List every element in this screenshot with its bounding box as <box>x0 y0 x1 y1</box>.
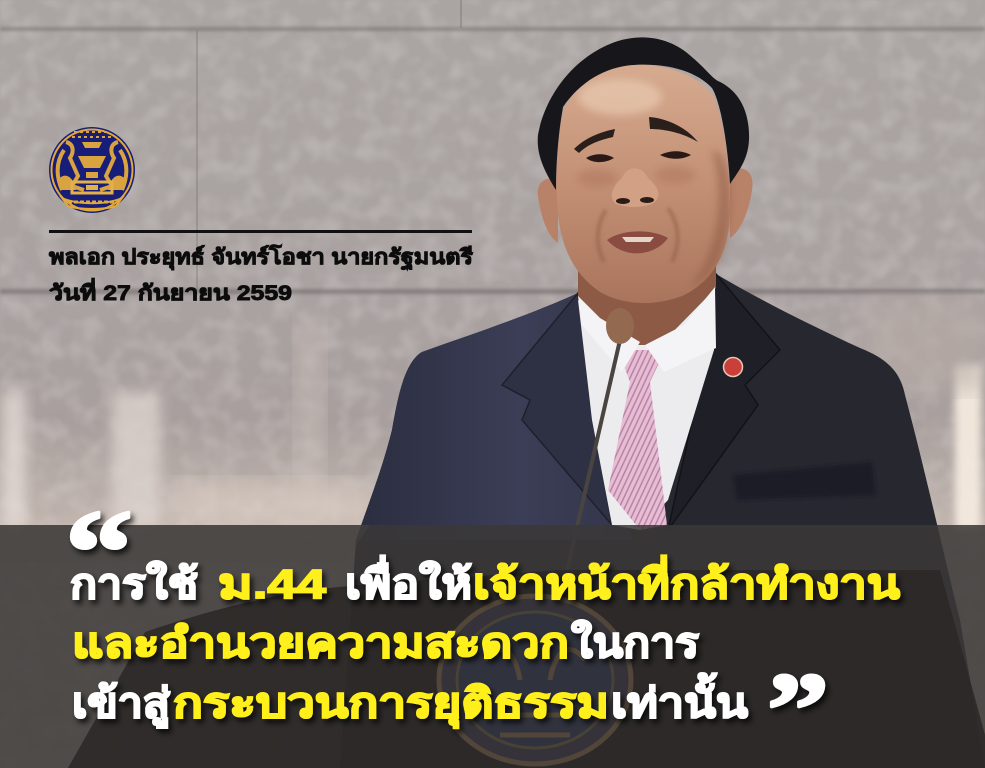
line 1: ม.44 <box>218 561 326 607</box>
quote text <box>65 485 900 768</box>
byline <box>49 244 474 305</box>
opening quotation mark: “ <box>65 485 133 618</box>
line 2: และอำนวยความสะดวก <box>72 620 569 666</box>
line 2: ในการ <box>571 619 699 666</box>
podium <box>0 525 985 768</box>
face <box>556 64 730 303</box>
left lapel <box>502 293 612 525</box>
logo: government emblem <box>49 127 135 213</box>
brows <box>574 117 698 153</box>
nose <box>612 168 658 207</box>
neck <box>578 240 716 345</box>
dark translucent band <box>0 525 985 768</box>
collar <box>578 287 716 372</box>
pocket <box>733 462 876 500</box>
tie <box>608 350 667 530</box>
lions <box>58 142 126 190</box>
lapel pin <box>724 358 742 376</box>
line 1: เจ้าหน้าที่กล้าทำงาน <box>473 555 900 607</box>
line 3: เท่านั้น <box>611 673 748 726</box>
podium emblem <box>439 596 631 764</box>
line 1 <box>70 555 900 607</box>
microphone <box>566 308 634 575</box>
facial shading <box>577 79 730 288</box>
pedestal <box>72 182 112 193</box>
teeth <box>622 237 654 242</box>
line 1: เพื่อให้ <box>345 555 472 607</box>
line 3: เข้าสู่ <box>72 680 170 729</box>
shirt <box>578 288 715 530</box>
mouth <box>607 231 668 253</box>
divider line <box>49 230 472 233</box>
date: วันที่ 27 กันยายน 2559 <box>49 277 292 305</box>
closing quotation mark: ” <box>767 651 829 768</box>
line 2 <box>72 619 699 666</box>
line 1: การใช้ <box>70 560 198 607</box>
left suit panel <box>356 293 632 540</box>
figure: speaker at podium <box>340 37 985 768</box>
suit jacket <box>340 274 985 768</box>
ears <box>538 168 753 243</box>
vase <box>78 142 106 178</box>
line 3 <box>72 673 748 729</box>
nostrils <box>616 197 654 204</box>
eyes <box>586 151 691 162</box>
base inscription <box>62 198 122 209</box>
line 3: กระบวนการยุติธรรม <box>173 680 609 729</box>
hair <box>538 37 749 190</box>
speaker name: พลเอก ประยุทธ์ จันทร์โอชา นายกรัฐมนตรี <box>49 244 474 271</box>
right lapel <box>668 274 780 530</box>
